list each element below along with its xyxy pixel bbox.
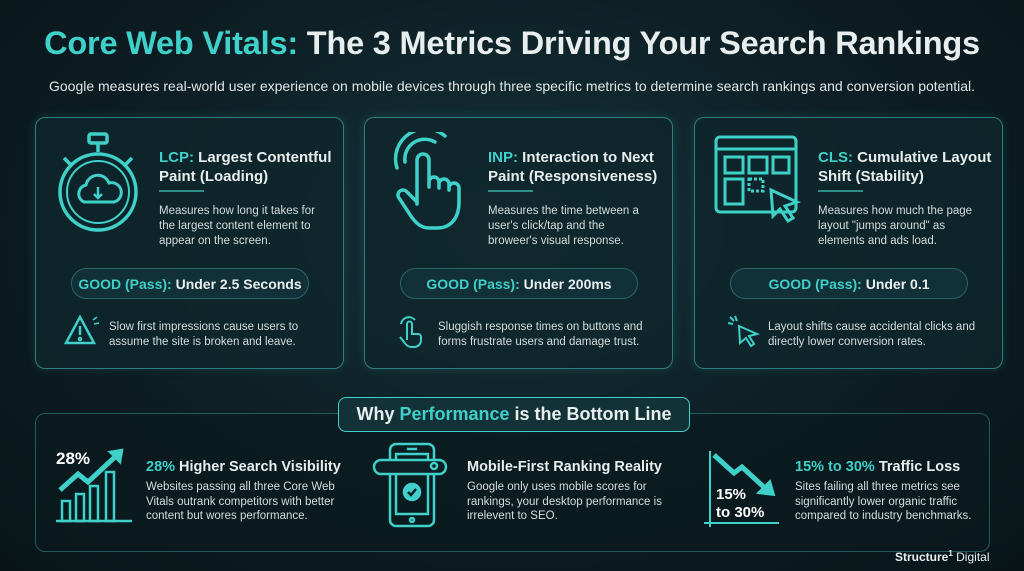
icon: rising chart: [56, 448, 132, 522]
pill: INP threshold: GOOD (Pass): Under 200ms: [426, 276, 612, 292]
icon: tap hand: [394, 132, 461, 230]
heading: bottom line banner: [338, 397, 690, 432]
icon: small tap: [399, 316, 422, 348]
heading: CLS: CLS: Cumulative Layout Shift (Stability): [818, 149, 991, 185]
icon: falling chart: [704, 451, 779, 527]
icon: phone: [372, 442, 448, 528]
icon: stopwatch: [58, 132, 138, 232]
panel: bottom line: [35, 413, 990, 552]
text: LCP description: Measures how long it takes for the largest content element to appear on the screen.: [159, 205, 315, 247]
text: INP note: Sluggish response times on buttons and forms frustrate users and damage trust.: [438, 321, 643, 348]
pill: CLS threshold: GOOD (Pass): Under 0.1: [768, 276, 930, 292]
text: mobile-first: Mobile-First Ranking Reality: [467, 459, 662, 475]
panel: LCP: [35, 117, 344, 369]
title: Core Web Vitals: The 3 Metrics Driving Your Search Rankings: [44, 25, 980, 61]
icon: shifting layout: [714, 136, 801, 223]
text: INP description: Measures the time between a user's click/tap and the broweer's visual response.: [488, 205, 639, 247]
logo: Structure1 Digital: [895, 549, 990, 564]
icon: rising chart: 28%: [56, 449, 90, 468]
pill: CLS threshold: [730, 268, 968, 299]
text: CLS note: Layout shifts cause accidental clicks and directly lower conversion rates.: [768, 321, 975, 348]
icon: warning: [64, 314, 100, 344]
text: LCP note: Slow first impressions cause users to assume the site is broken and leave.: [109, 321, 298, 348]
panel: bottom line: Websites passing all three Core Web Vitals outrank competitors with better content but wores performance.: [146, 481, 335, 522]
heading: LCP: LCP: Largest Contentful Paint (Loading): [159, 149, 332, 185]
pill: INP threshold: [400, 268, 638, 299]
pill: LCP threshold: [71, 268, 309, 299]
pill: LCP threshold: GOOD (Pass): Under 2.5 Seconds: [78, 276, 302, 292]
icon: cursor: [728, 316, 760, 348]
subtitle: Google measures real-world user experience on mobile devices through three specific metrics to determine search rankings and conversion potential.: [49, 78, 975, 94]
panel: CLS: [694, 117, 1003, 369]
text: CLS description: Measures how much the page layout "jumps around" as elements and ads load.: [818, 205, 972, 247]
heading: bottom line banner: Why Performance is the Bottom Line: [356, 404, 672, 424]
panel: INP: [364, 117, 673, 369]
heading: INP: INP: Interaction to Next Paint (Responsiveness): [488, 149, 657, 185]
text: traffic loss: 15% to 30% Traffic Loss: [795, 459, 960, 475]
panel: bottom line: Sites failing all three metrics see significantly lower organic traffic compared to industry benchmarks.: [795, 481, 971, 522]
icon: falling chart: to 30%: [716, 504, 764, 521]
text: visibility stat: 28% Higher Search Visibility: [146, 459, 341, 475]
icon: falling chart: 15%: [716, 486, 746, 503]
panel: bottom line: Google only uses mobile scores for rankings, your desktop performance is irrelevent to SEO.: [467, 481, 662, 522]
